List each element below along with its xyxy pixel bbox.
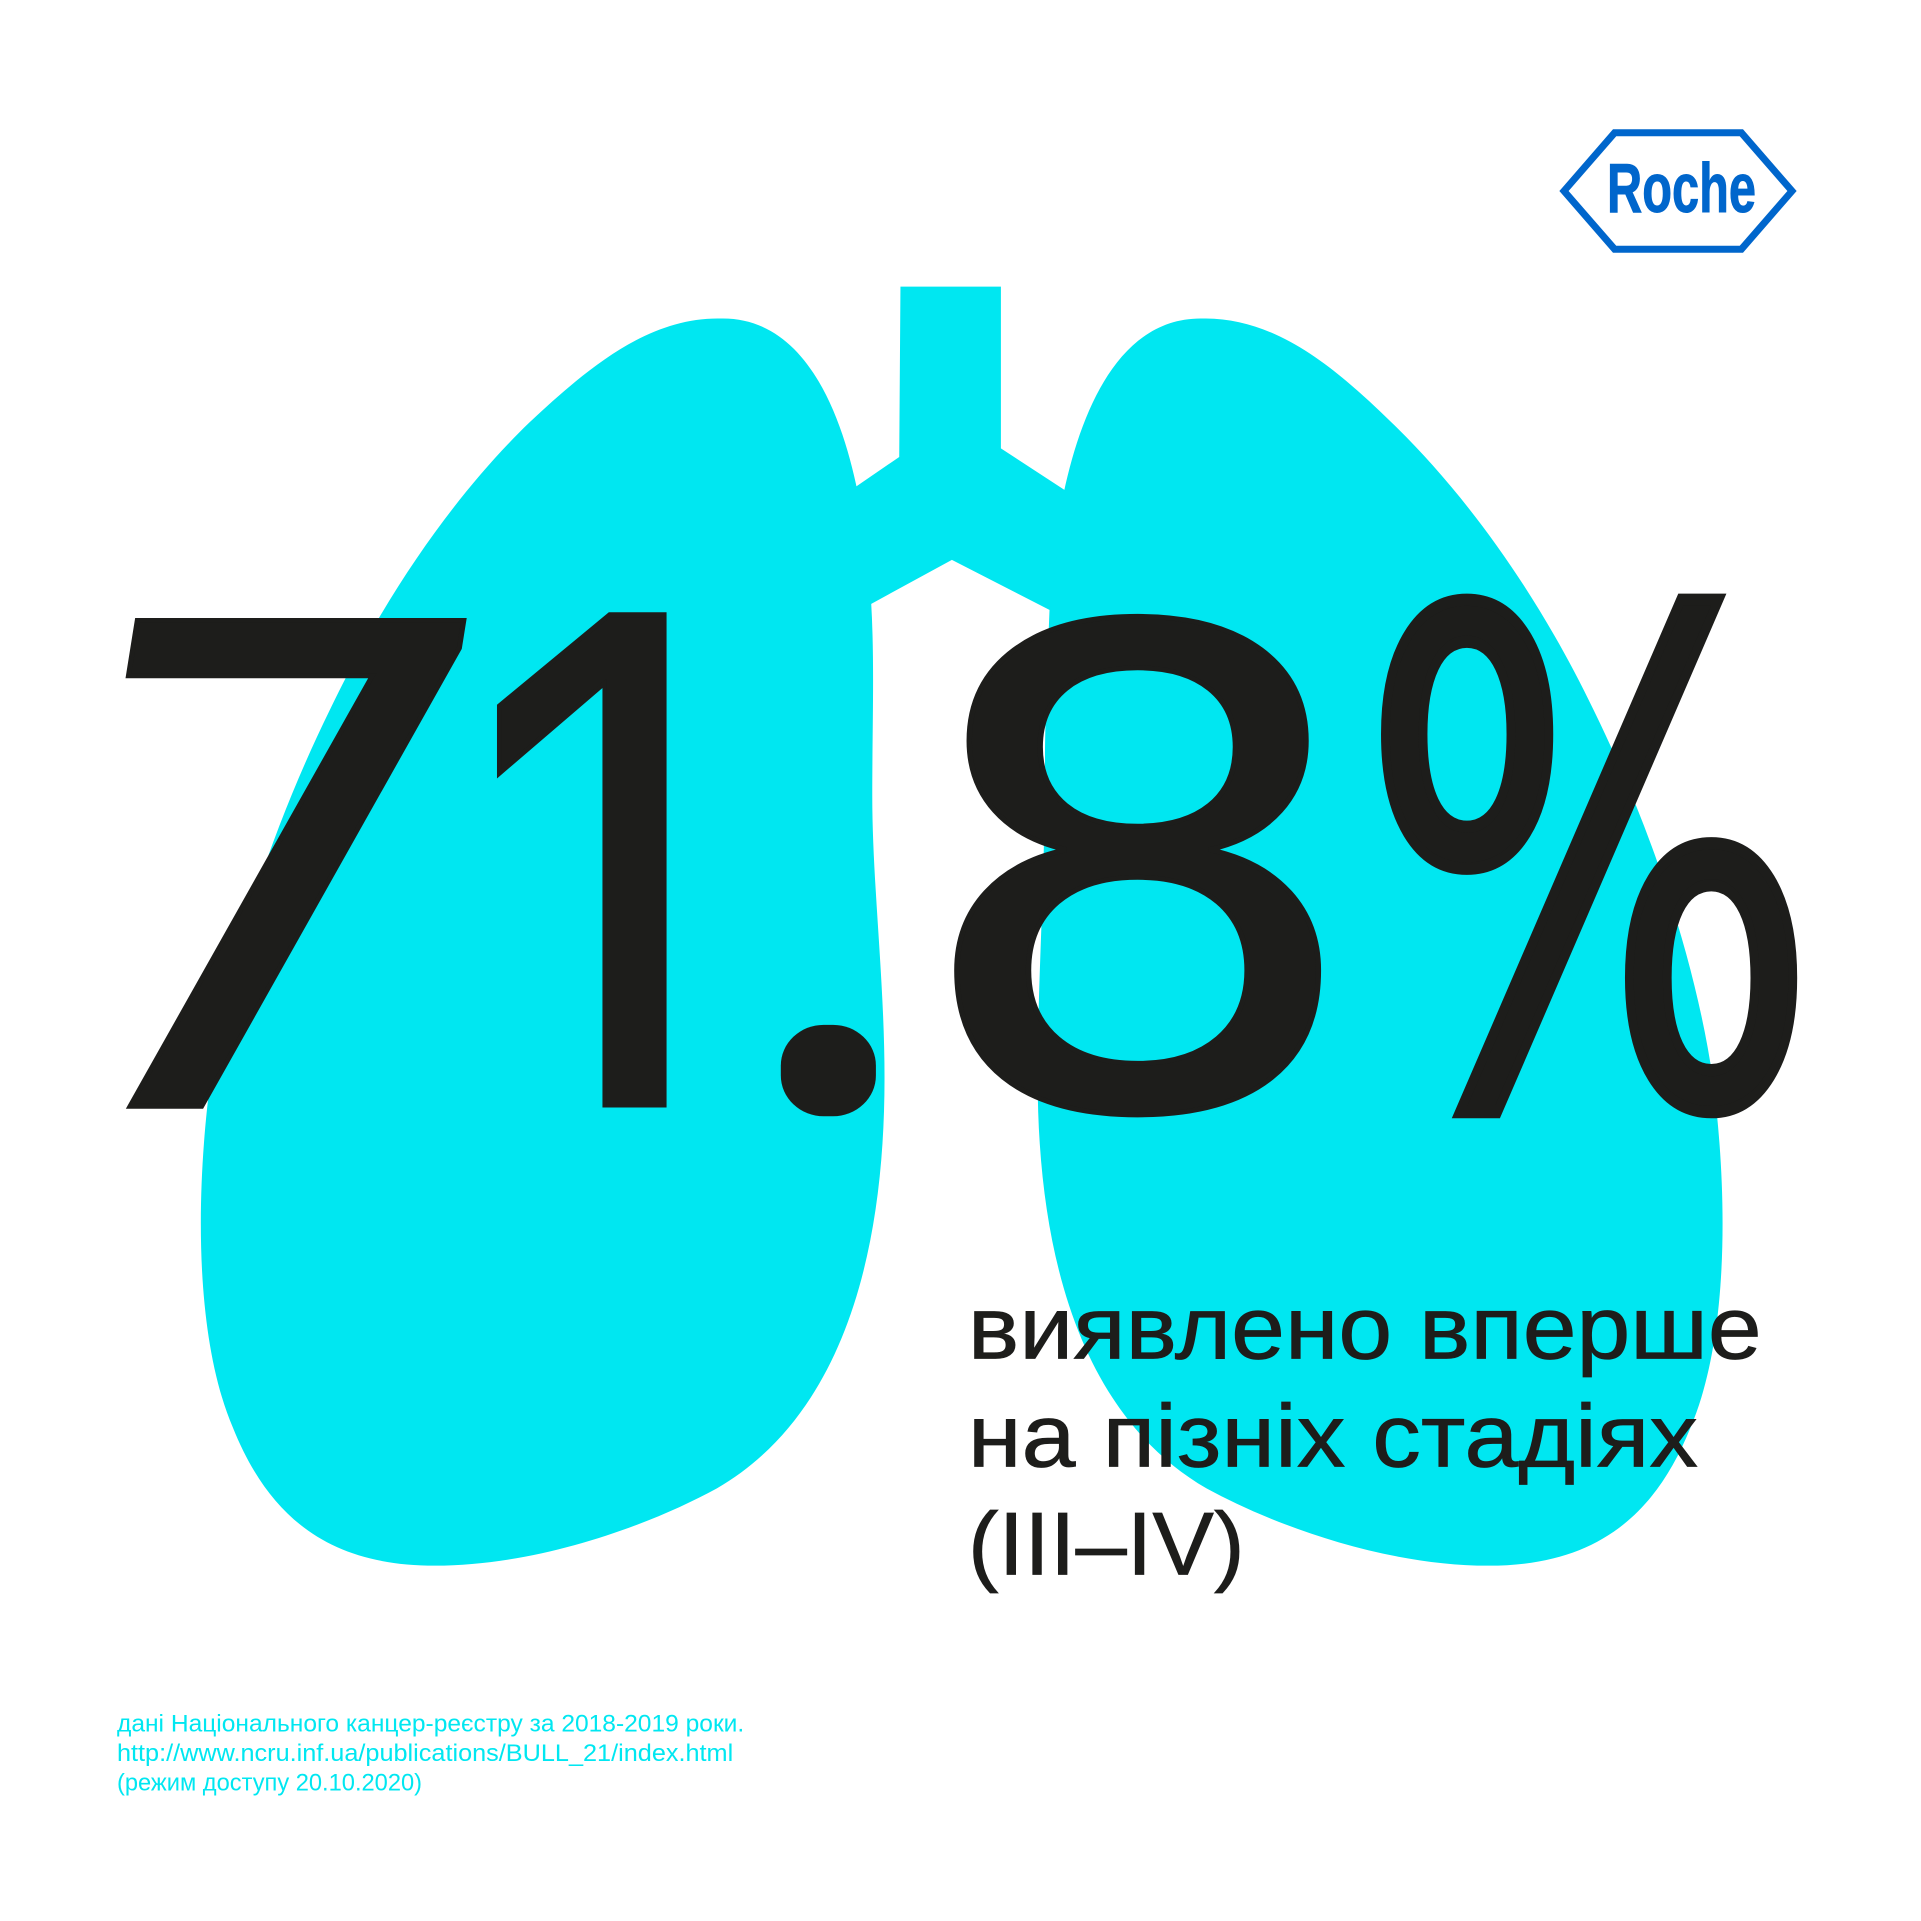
left lung (201, 318, 885, 1566)
source note: http://www.ncru.inf.ua/publications/BULL_21/index.html (117, 1740, 733, 1767)
logo: Roche: Roche (1607, 149, 1756, 227)
source note (117, 1711, 744, 1796)
main figure: 71.8%: 1 (434, 438, 811, 1350)
source note: (режим доступу 20.10.2020) (117, 1769, 422, 1796)
subheading: detected for the first time at late stages: на пізніх стадіях (968, 1385, 1698, 1485)
subheading: detected for the first time at late stages: (III–IV) (968, 1493, 1245, 1593)
main figure: 71.8%: . (815, 992, 842, 1096)
infographic canvas (117, 129, 1798, 1796)
main figure: 71.8%: % (1359, 474, 1820, 1262)
source note: дані Національного канцер-реєстру за 2018-2019 роки. (117, 1711, 744, 1738)
subheading: detected for the first time at late stages: виявлено вперше (968, 1278, 1762, 1378)
subheading: detected for the first time at late stages (968, 1278, 1762, 1593)
trachea and bronchi (856, 287, 1065, 610)
right lung (1038, 318, 1723, 1566)
main figure: 71.8%: 8 (908, 495, 1368, 1262)
main figure: 71.8% (126, 594, 1798, 1118)
illustration: lungs (201, 287, 1723, 1566)
logo: Roche (1564, 133, 1792, 249)
